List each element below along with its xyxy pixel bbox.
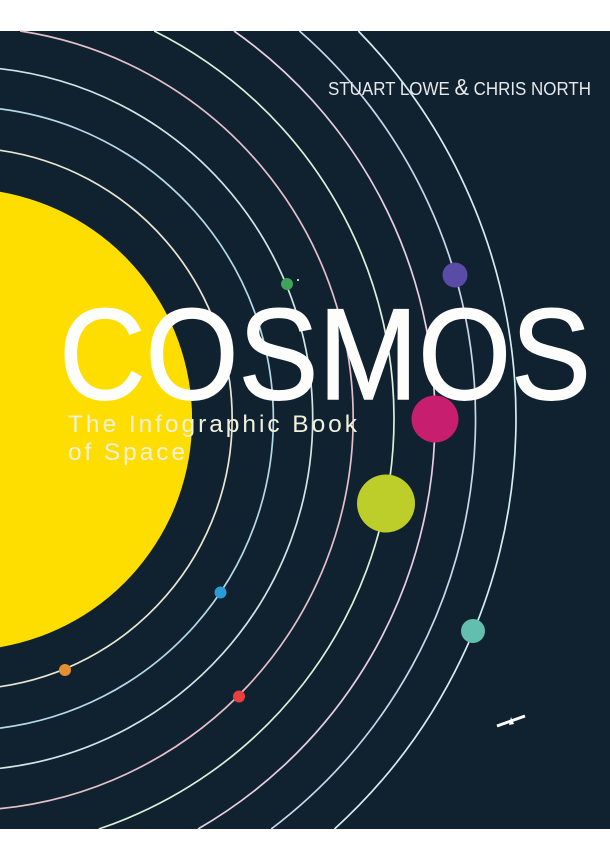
planet: venus (214, 586, 226, 598)
planet: mercury (59, 664, 71, 676)
icon: satellite (497, 716, 525, 726)
authors: STUART LOWE & CHRIS NORTH (328, 74, 591, 100)
planet: mars (233, 690, 245, 702)
planet: purple (442, 262, 468, 288)
icon: sun (0, 192, 192, 647)
planet: lime (357, 474, 415, 532)
subtitle: The Infographic Book (68, 411, 358, 438)
subtitle: of Space (68, 439, 185, 466)
planet: magenta (412, 396, 458, 442)
solar system diagram (0, 31, 516, 829)
subtitle (68, 411, 358, 466)
planet: teal (461, 619, 485, 643)
planet: green (281, 278, 293, 290)
orbit lines (0, 31, 516, 829)
moon dot (297, 279, 299, 281)
